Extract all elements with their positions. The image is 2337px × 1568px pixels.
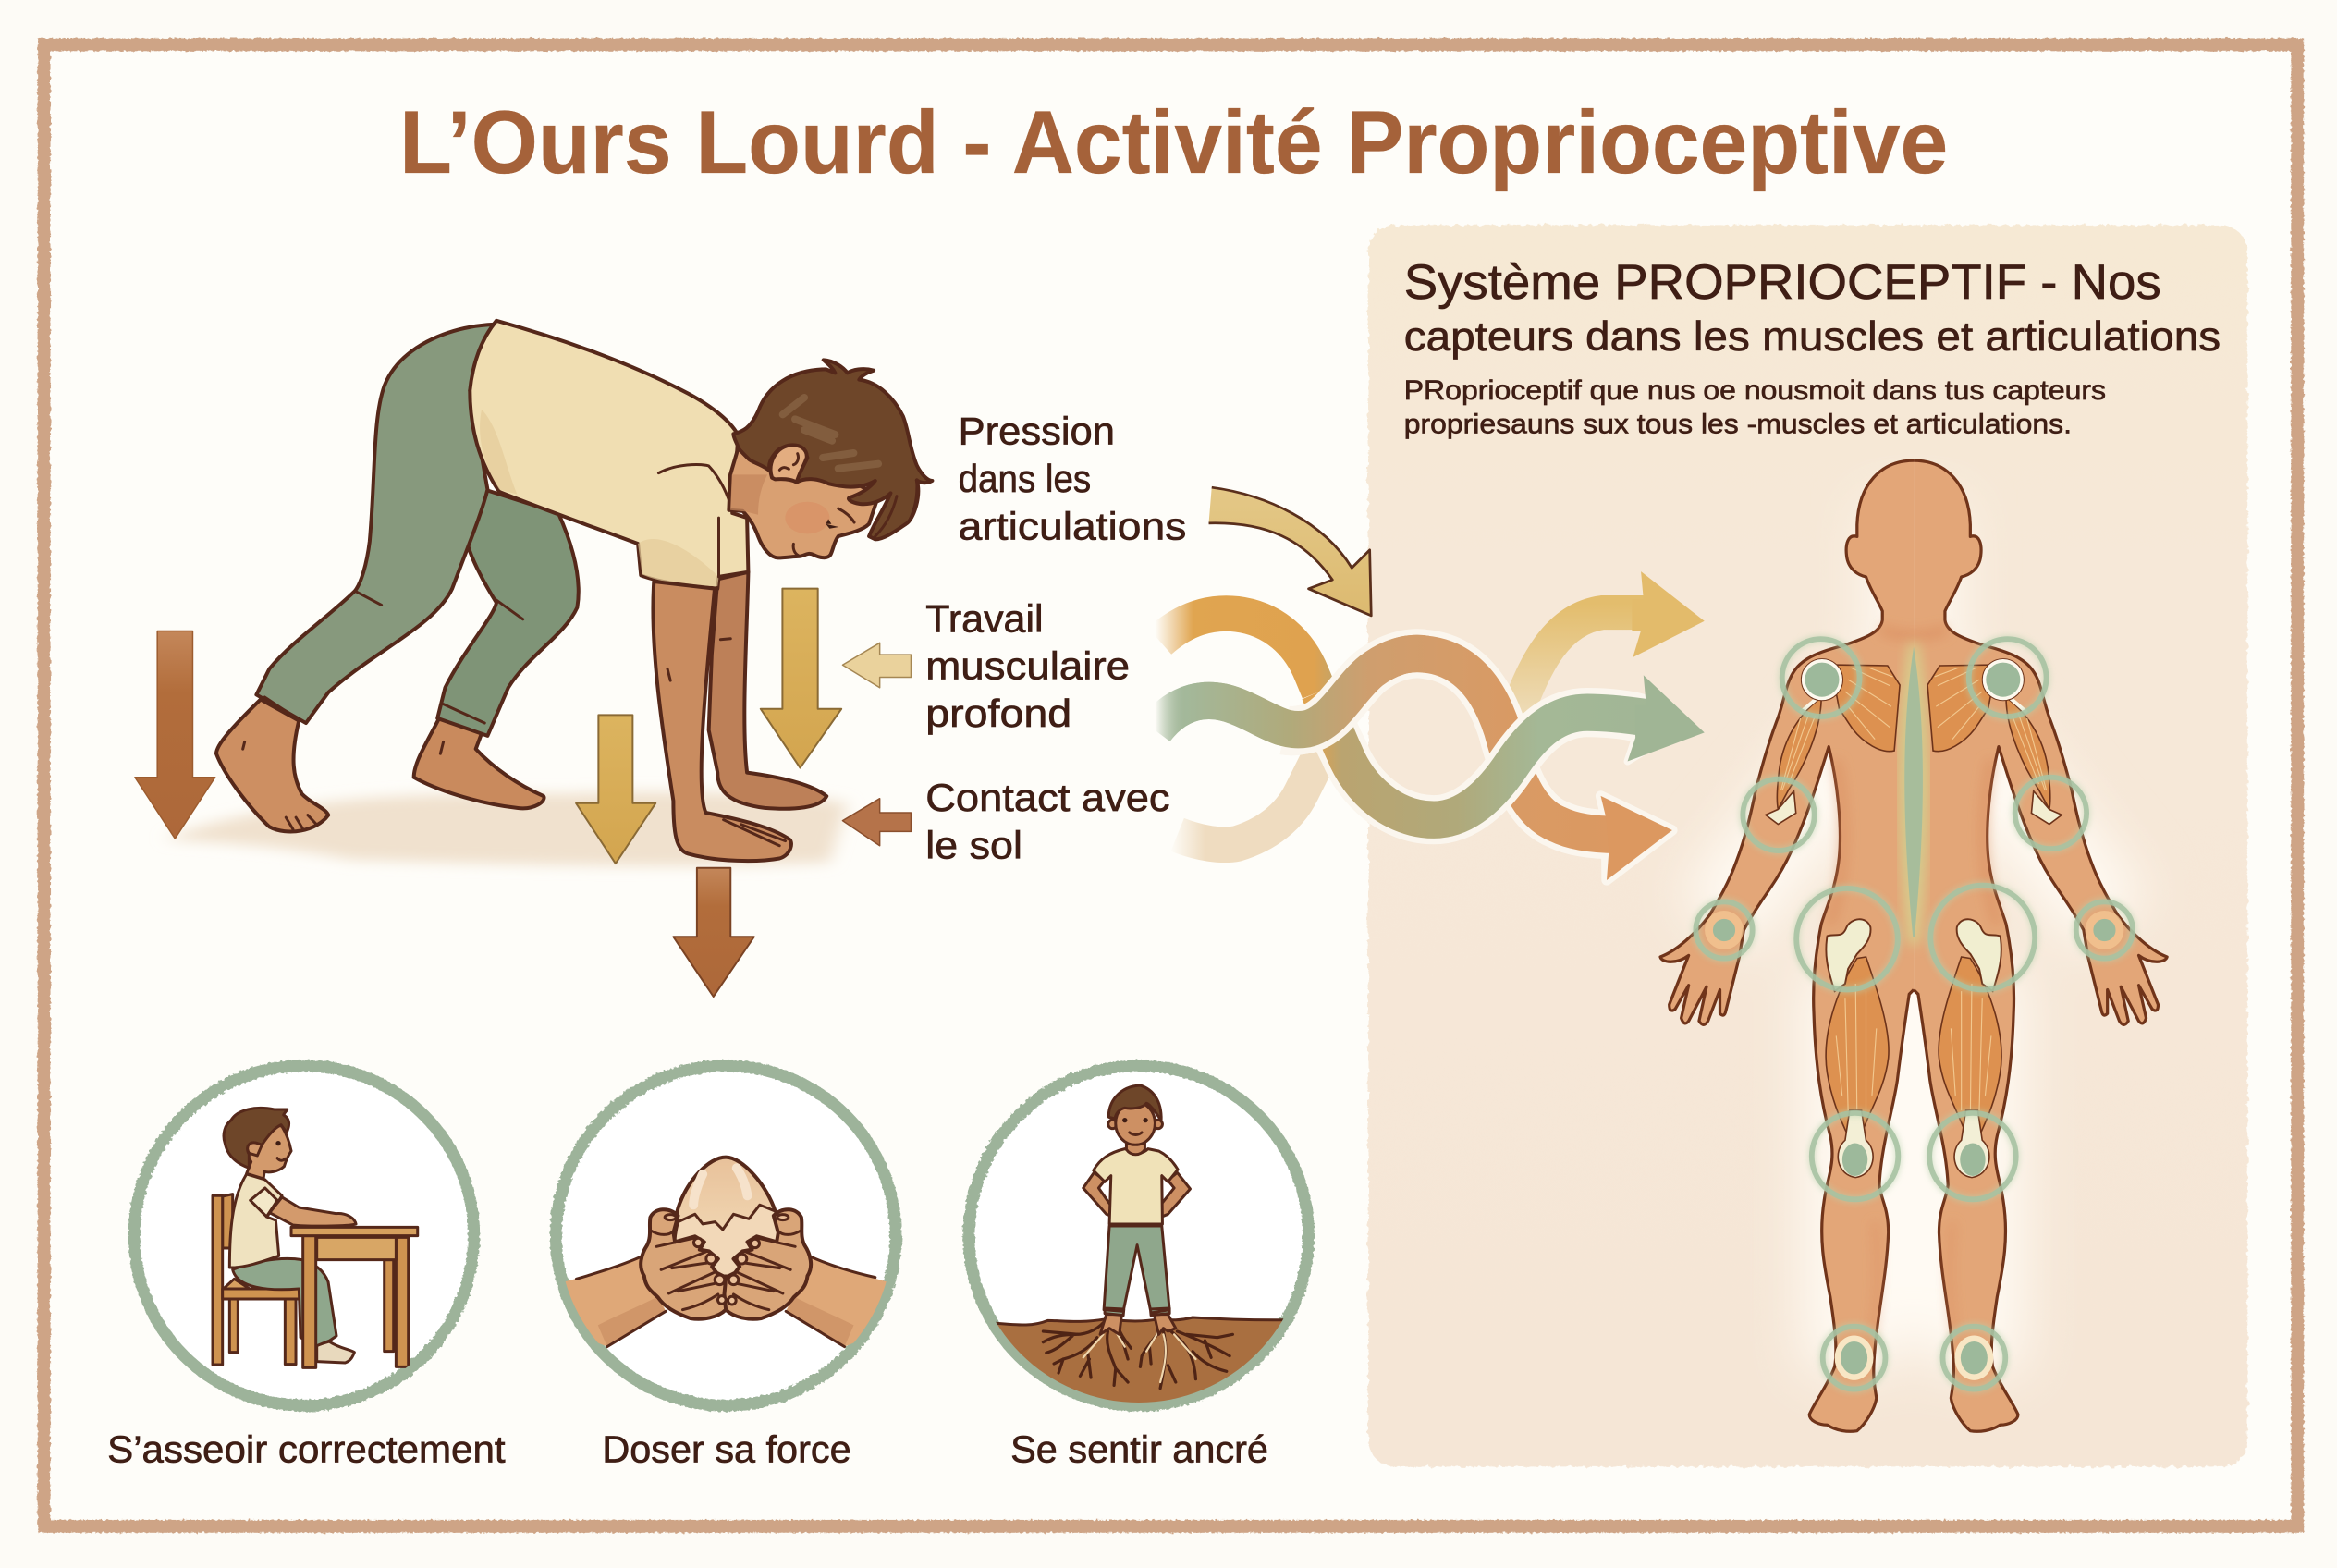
ribbon: green crossing over (halo) [1285, 665, 1380, 731]
child rooted in ground [989, 1085, 1291, 1412]
panel: proprioceptive system [1368, 225, 2247, 1466]
label: contact sol: le sol [925, 824, 1022, 867]
panel heading: capteurs dans les muscles et articulations [1404, 314, 2221, 360]
body diagram [1660, 460, 2167, 1431]
right half silhouette [1914, 460, 2167, 1431]
label: contact sol [925, 776, 1170, 867]
ribbon: gold to green upper [1159, 614, 1319, 692]
braided flow arrows [1155, 571, 1705, 880]
label: travail musculaire: profond [925, 692, 1071, 735]
panel heading [1404, 256, 2221, 360]
ribbon: green to orange (halo) [1285, 654, 1617, 835]
right arm [786, 1256, 894, 1347]
child at desk [213, 1108, 418, 1367]
near foot [216, 700, 328, 832]
green arrowhead [1628, 675, 1705, 761]
caption: sitting: S’asseoir correctement [107, 1428, 506, 1471]
hands holding egg [557, 1158, 894, 1347]
joint sensors [1695, 639, 2133, 1390]
face and neck [728, 441, 878, 557]
far arm [709, 572, 826, 809]
ring [134, 1066, 474, 1405]
spine [1903, 643, 1924, 939]
left half silhouette [1660, 460, 1914, 1431]
caption: force: Doser sa force [602, 1428, 851, 1471]
right hand [724, 1209, 811, 1319]
ribbon: green crossing over [1155, 654, 1426, 730]
illustration: child in bear walk [216, 321, 932, 861]
roots [1043, 1319, 1232, 1389]
shirt [470, 321, 748, 589]
near leg [256, 325, 494, 723]
ribbon: gold to green lower [1319, 692, 1651, 820]
arrow: pression curved [1209, 487, 1371, 616]
shoulder blade muscles [1831, 665, 1997, 752]
panel description [1404, 375, 2106, 439]
panel description: PRoprioceptif que nus oe nousmoit dans tus capteurs [1404, 375, 2106, 406]
green arrowhead halo [1628, 705, 1666, 761]
circle 3: feeling anchored [969, 1066, 1309, 1412]
arrow: right gold [761, 589, 841, 768]
panel background [1368, 225, 2247, 1466]
ribbon: cream lower left [1178, 745, 1325, 845]
ribbon: gold to green lower (halo) [1325, 706, 1639, 820]
label: travail musculaire [925, 597, 1130, 735]
arrow: to deep muscle work [842, 643, 911, 688]
title: L’Ours Lourd - Activité Proprioceptive [399, 92, 1948, 192]
panel description: propriesauns sux tous les -muscles et articulations. [1404, 409, 2072, 439]
label: contact sol: Contact avec [925, 776, 1170, 819]
egg [675, 1156, 777, 1228]
hair [733, 360, 932, 539]
panel heading: Système PROPRIOCEPTIF - Nos [1404, 256, 2161, 310]
soil [989, 1317, 1291, 1412]
head [1126, 1142, 1144, 1155]
orange arrowhead [1601, 796, 1672, 880]
ring [556, 1066, 896, 1405]
caption: anchored: Se sentir ancré [1010, 1428, 1268, 1471]
label: pression: dans les [959, 457, 1091, 500]
pants [1104, 1226, 1169, 1316]
label: travail musculaire: Travail [925, 597, 1044, 641]
circle 2: dosing force [556, 1066, 896, 1405]
thigh muscles and bones [1826, 919, 2001, 1178]
arrow: centre gold [576, 715, 655, 864]
head [728, 360, 932, 557]
ribbon: green to orange [1155, 654, 1617, 835]
far foot [414, 716, 544, 808]
ground shadow [164, 792, 848, 865]
arms [1083, 1172, 1190, 1218]
arm muscles and elbow bones [1766, 694, 2062, 825]
force arrows [135, 589, 911, 997]
shirt [1094, 1149, 1178, 1224]
ribbon: gold to upper arrow [1517, 571, 1705, 713]
arrow: to ground contact [842, 799, 911, 846]
feet [1100, 1315, 1176, 1334]
far leg [437, 489, 579, 736]
ring [969, 1066, 1309, 1405]
body glow [1714, 507, 2113, 1371]
arrow: left brown [135, 631, 215, 839]
orange arrowhead halo [1601, 796, 1672, 880]
torso shading [1830, 629, 1997, 1349]
circle 1: sitting correctly [134, 1066, 474, 1405]
near arm and hand [653, 582, 791, 861]
label: pression [959, 409, 1186, 548]
left hand [641, 1209, 728, 1319]
label: pression: Pression [959, 409, 1115, 452]
finger lines [652, 1231, 800, 1310]
label: travail musculaire: musculaire [925, 643, 1130, 687]
arrow: bottom brown [673, 868, 754, 997]
ear [771, 445, 807, 483]
label: pression: articulations [959, 505, 1186, 548]
left arm [566, 1259, 666, 1346]
